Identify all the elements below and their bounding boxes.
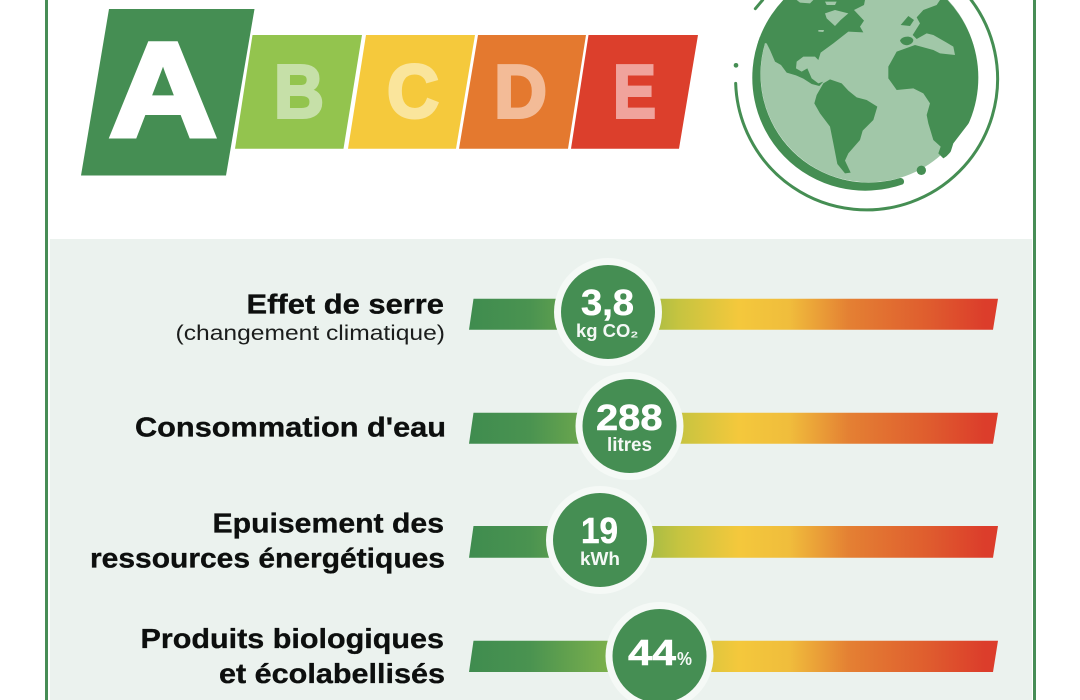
value badge: [554, 258, 662, 366]
panel: indicators background: [50, 239, 1032, 700]
row: epuisement des ressources: [90, 486, 998, 594]
value badge: 19: [581, 510, 618, 551]
bar: [469, 526, 998, 558]
value badge: [546, 486, 654, 594]
label: et écolabellisés: [219, 658, 445, 689]
grade C: C: [387, 50, 439, 134]
label: Consommation d'eau: [135, 412, 446, 443]
value badge: 288: [596, 397, 662, 438]
orbit ring short segment: [755, 0, 763, 9]
label: [140, 623, 445, 689]
label: (changement climatique): [176, 322, 445, 345]
value badge: kWh: [580, 549, 620, 569]
row: consommation d'eau: [135, 372, 998, 480]
bar: [469, 413, 998, 444]
grade E: E: [613, 50, 656, 134]
value badge: 3,8: [581, 282, 634, 323]
grade C: [348, 35, 475, 149]
orbit ring: [736, 0, 998, 210]
label: [90, 508, 445, 574]
grade B: B: [274, 50, 324, 134]
value badge: kg CO₂: [576, 321, 638, 341]
value badge: %: [677, 649, 692, 669]
bar: [469, 641, 998, 672]
label: Effet de serre: [246, 288, 444, 320]
value badge: [606, 602, 714, 700]
hudson bay and arctic islands: [797, 0, 848, 32]
label: Produits biologiques: [140, 623, 444, 654]
south america: [814, 79, 877, 173]
globe crescent: [752, 37, 904, 191]
grade A: [81, 9, 254, 176]
grade D: D: [494, 50, 547, 134]
grade B: [235, 35, 362, 149]
label: ressources énergétiques: [90, 543, 445, 574]
row: produits biologiques: [140, 602, 998, 700]
value badge: litres: [607, 435, 652, 456]
label: Epuisement des: [212, 508, 444, 539]
value badge: 44: [628, 632, 676, 673]
label: [176, 288, 445, 345]
grade A: A: [109, 16, 217, 165]
bar: [469, 299, 998, 330]
grade E: [571, 35, 698, 149]
north america: [758, 0, 865, 86]
africa and eurasia: [888, 0, 987, 158]
grade D: [459, 35, 586, 149]
eco-score scale A to E: [81, 9, 698, 176]
value badge: [576, 372, 684, 480]
icon: green globe: [734, 0, 998, 210]
orbit dots: [734, 63, 926, 175]
row: effet de serre: [176, 258, 998, 366]
